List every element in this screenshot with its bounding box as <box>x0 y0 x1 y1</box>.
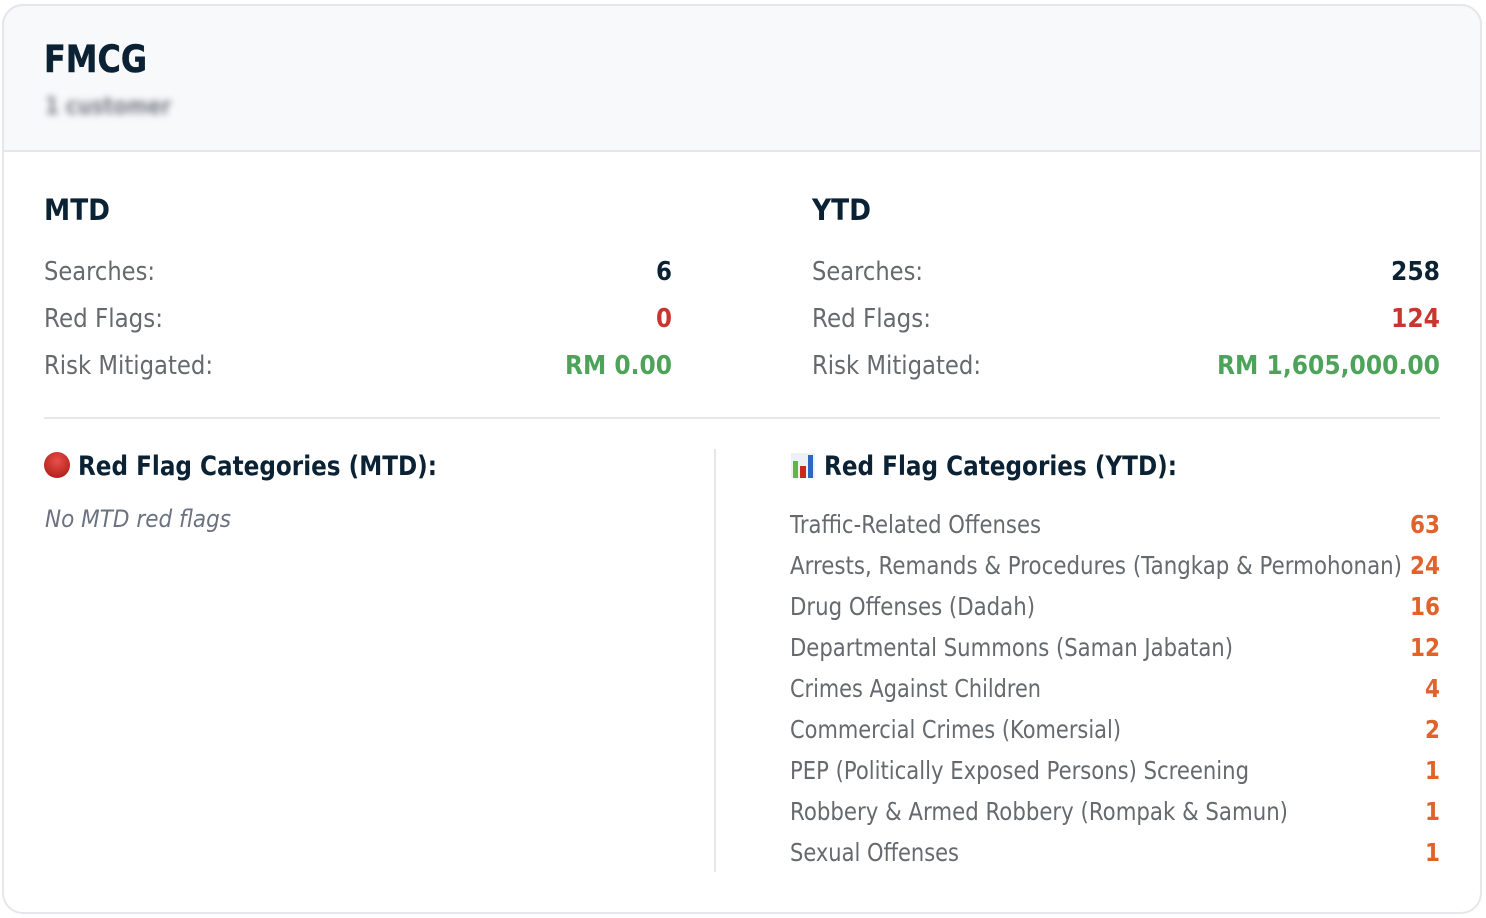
row: searches: 6 <box>656 257 672 287</box>
header panel <box>3 5 1481 151</box>
panel: MTD categories <box>44 451 437 533</box>
empty note: No MTD red flags <box>45 505 231 533</box>
row: risk mitigated: RM 1,605,000.00 <box>1217 351 1440 381</box>
row: risk mitigated: Risk Mitigated: <box>812 351 981 381</box>
category row: Commercial Crimes (Komersial) <box>790 715 1121 744</box>
row: red flags: 0 <box>656 304 672 334</box>
category row: PEP (Politically Exposed Persons) Screening <box>790 756 1249 785</box>
category row: Drug Offenses (Dadah) <box>790 592 1035 621</box>
panel: YTD categories <box>789 451 1440 867</box>
panel: MTD stats <box>44 193 672 381</box>
category row: Departmental Summons (Saman Jabatan) <box>790 633 1233 662</box>
row: red flags: Red Flags: <box>44 304 163 334</box>
category row: Sexual Offenses <box>790 838 959 867</box>
category row <box>790 674 1440 703</box>
heading: MTD: MTD <box>44 193 110 227</box>
category row <box>789 510 1440 539</box>
heading: categories YTD: Red Flag Categories (YTD): <box>824 451 1177 482</box>
icon: bar chart <box>791 453 815 478</box>
category row: 63 <box>1410 510 1440 539</box>
row: red flags: Red Flags: <box>812 304 931 334</box>
row: searches: Searches: <box>44 257 155 287</box>
category row: Arrests, Remands & Procedures (Tangkap & Permohonan) <box>790 551 1402 580</box>
category row: 1 <box>1425 838 1440 867</box>
row: searches: 258 <box>1391 257 1440 287</box>
row: risk mitigated: RM 0.00 <box>565 351 672 381</box>
row: red flags: 124 <box>1391 304 1440 334</box>
row: searches: Searches: <box>812 257 923 287</box>
category row: 2 <box>1425 715 1440 744</box>
row: risk mitigated: Risk Mitigated: <box>44 351 213 381</box>
category row <box>790 715 1440 744</box>
row: risk mitigated <box>44 351 672 381</box>
title: FMCG <box>44 38 147 81</box>
icon: red circle <box>44 452 70 478</box>
category row: Crimes Against Children <box>790 674 1041 703</box>
heading: YTD: YTD <box>811 193 871 227</box>
category row: Robbery & Armed Robbery (Rompak & Samun) <box>790 797 1288 826</box>
panel: YTD stats <box>811 193 1440 381</box>
category row: 24 <box>1410 551 1440 580</box>
heading: categories MTD: Red Flag Categories (MTD): <box>78 451 437 482</box>
row: red flags <box>812 304 1440 334</box>
row: red flags <box>44 304 672 334</box>
category row: 12 <box>1410 633 1440 662</box>
category row <box>790 838 1440 867</box>
blurred subtitle: 1 customer <box>45 92 171 120</box>
row: risk mitigated <box>812 351 1440 381</box>
category row: 1 <box>1425 756 1440 785</box>
category row: 1 <box>1425 797 1440 826</box>
category row: 4 <box>1425 674 1440 703</box>
category row: 16 <box>1410 592 1440 621</box>
category row <box>790 592 1440 621</box>
row: searches <box>44 257 672 287</box>
category row: Traffic-Related Offenses <box>789 510 1041 539</box>
row: searches <box>812 257 1440 287</box>
